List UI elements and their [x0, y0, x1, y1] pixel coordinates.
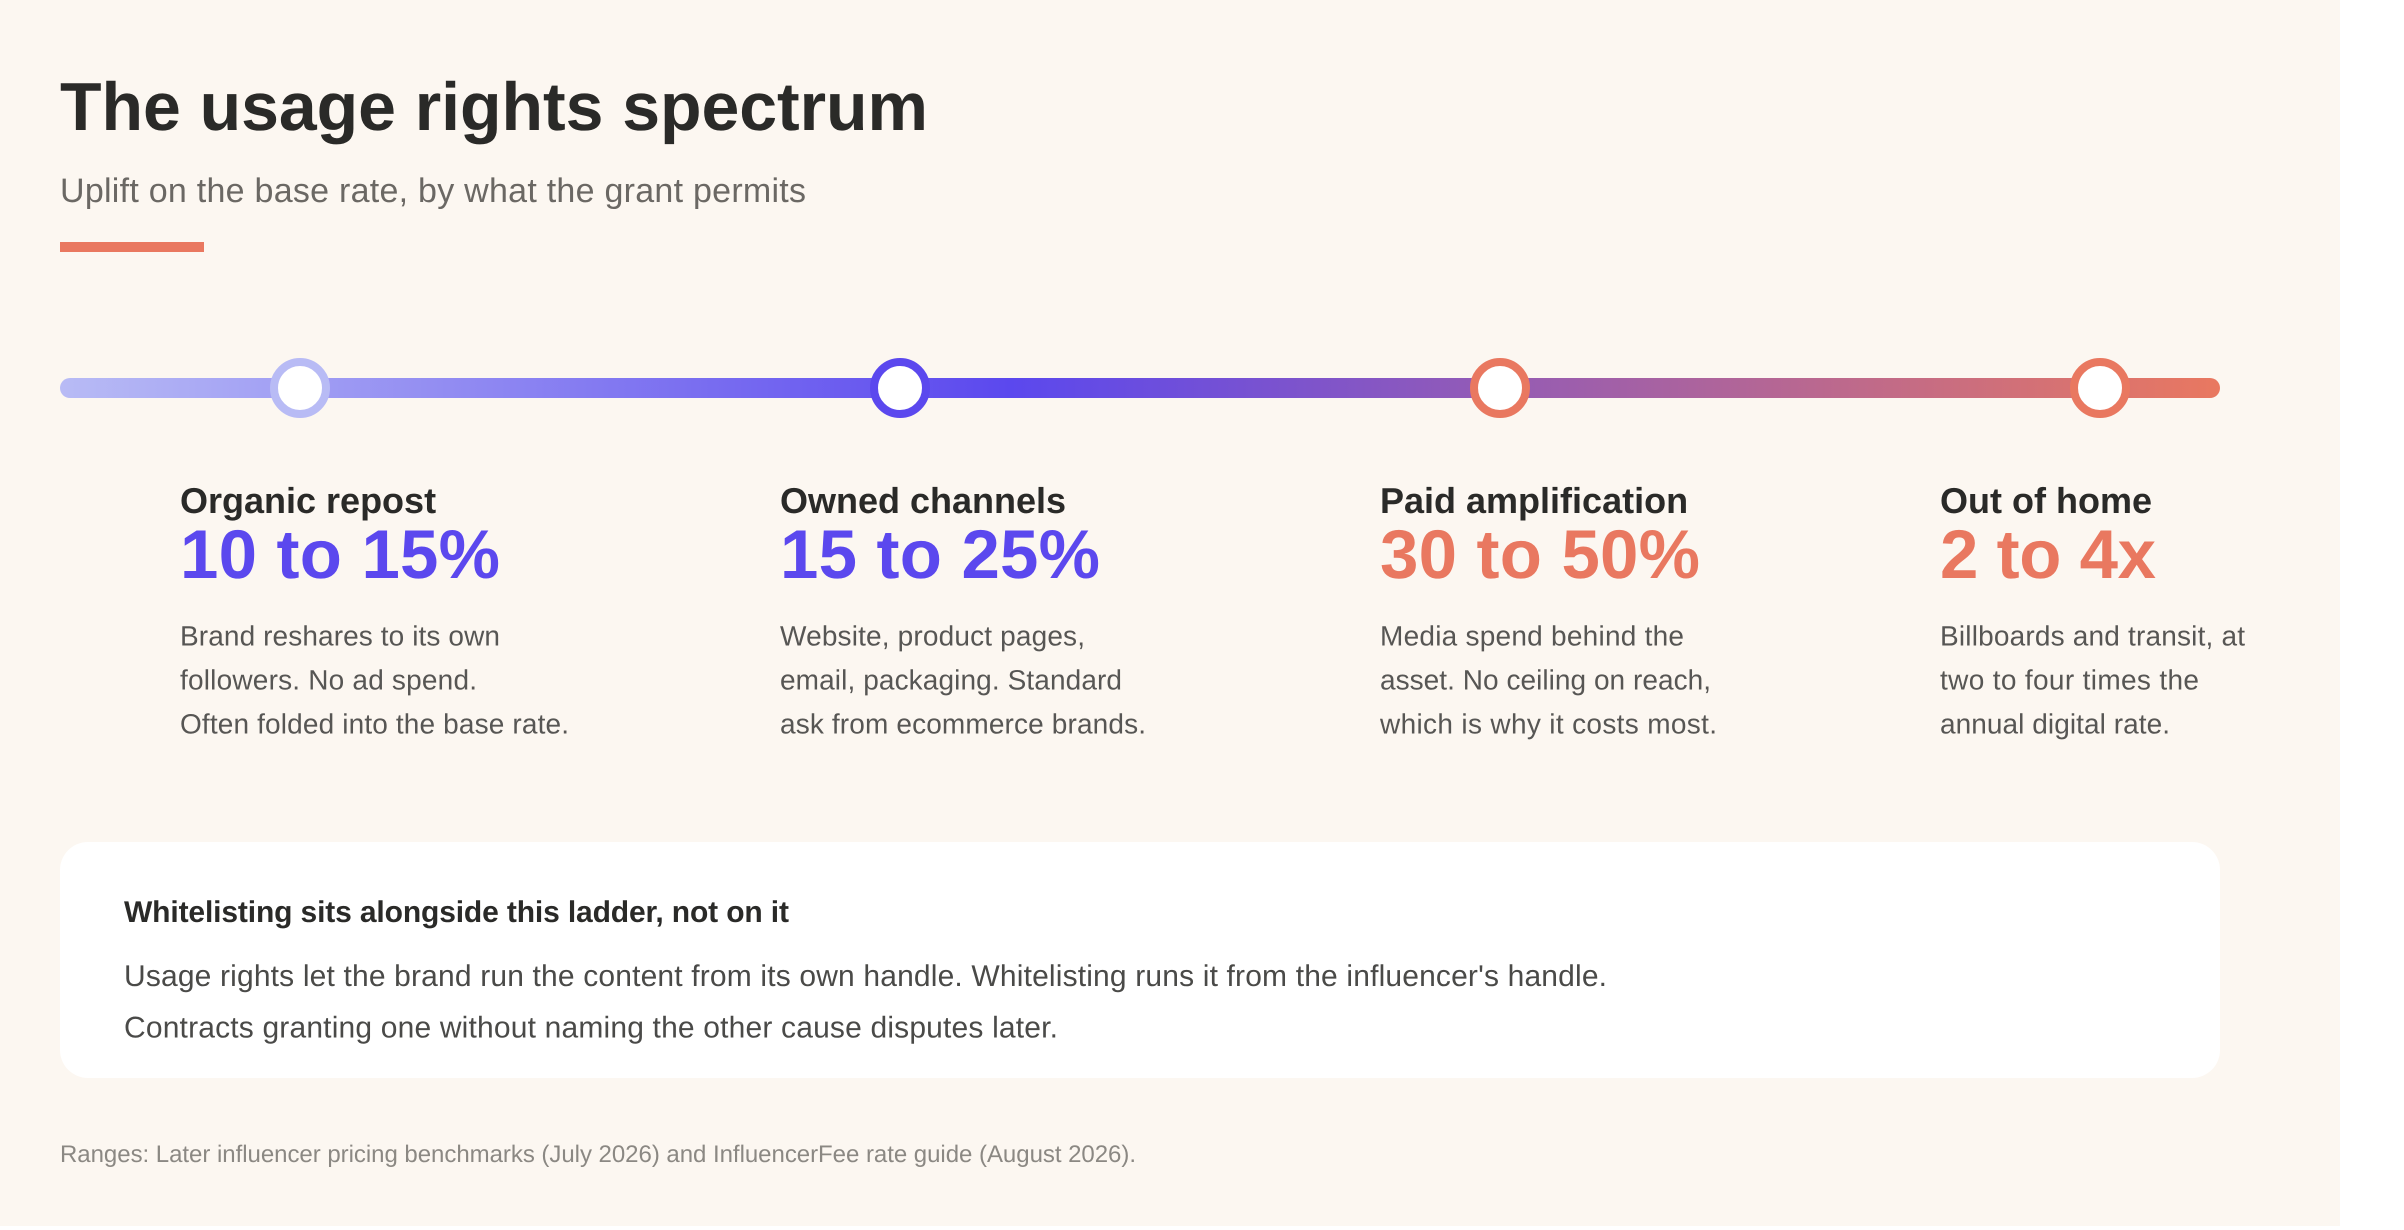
description: which is why it costs most.: [1379, 708, 1717, 740]
label: Owned channels: [780, 480, 1066, 521]
callout panel: [60, 842, 2220, 1078]
description: annual digital rate.: [1940, 708, 2170, 740]
marker: owned channels: [874, 362, 926, 414]
range: 2 to 4x: [1940, 516, 2156, 593]
range: 30 to 50%: [1380, 516, 1700, 593]
marker: out of home: [2074, 362, 2126, 414]
label: Paid amplification: [1380, 480, 1688, 521]
description: [1379, 620, 1717, 740]
callout background: [60, 842, 2220, 1078]
spectrum timeline: [60, 362, 2220, 414]
accent bar: [60, 242, 204, 252]
callout body: Contracts granting one without naming the other cause disputes later.: [124, 1012, 1058, 1044]
column: organic repost: [180, 480, 569, 740]
description: Brand reshares to its own: [180, 620, 500, 652]
description: Media spend behind the: [1380, 620, 1684, 652]
description: [180, 620, 569, 740]
source note: Ranges: Later influencer pricing benchmarks (July 2026) and InfluencerFee rate guide (August 2026).: [60, 1141, 1136, 1168]
title: The usage rights spectrum: [60, 69, 928, 145]
gradient track: [60, 378, 2220, 398]
range: 10 to 15%: [180, 516, 500, 593]
marker: organic repost: [274, 362, 326, 414]
description: ask from ecommerce brands.: [780, 708, 1146, 740]
description: followers. No ad spend.: [180, 664, 477, 696]
description: two to four times the: [1940, 664, 2199, 696]
description: asset. No ceiling on reach,: [1380, 664, 1711, 696]
callout body: [124, 960, 1607, 1044]
description: email, packaging. Standard: [780, 664, 1122, 696]
column: owned channels: [780, 480, 1146, 740]
description: Website, product pages,: [780, 620, 1085, 652]
description: [780, 620, 1146, 740]
description: Often folded into the base rate.: [180, 708, 569, 740]
label: Out of home: [1940, 480, 2152, 521]
description: [1940, 620, 2245, 740]
description: Billboards and transit, at: [1940, 620, 2245, 652]
marker: paid amplification: [1474, 362, 1526, 414]
callout heading: Whitelisting sits alongside this ladder, not on it: [124, 896, 789, 929]
callout body: Usage rights let the brand run the content from its own handle. Whitelisting runs it from the influencer's handle.: [124, 960, 1607, 993]
column: out of home: [1940, 480, 2245, 740]
label: Organic repost: [180, 480, 436, 521]
range: 15 to 25%: [780, 516, 1100, 593]
subtitle: Uplift on the base rate, by what the grant permits: [60, 172, 806, 210]
column: paid amplification: [1379, 480, 1717, 740]
